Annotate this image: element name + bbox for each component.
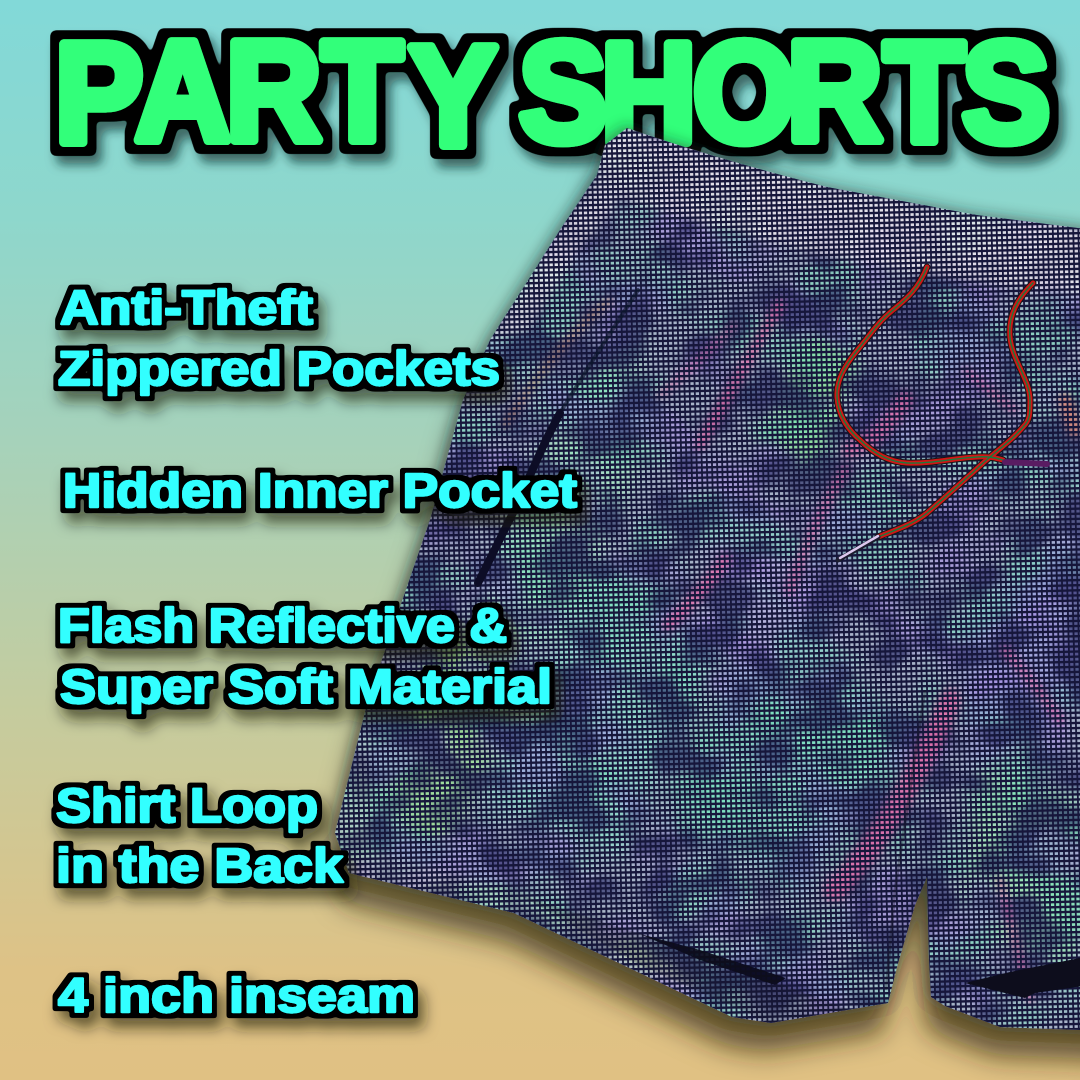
feature list xyxy=(56,282,577,1023)
feature: anti-theft zippered pockets xyxy=(58,282,500,396)
feature: anti-theft zippered pockets: Anti-Theft xyxy=(60,282,313,335)
hem shading xyxy=(520,895,850,1023)
pink reflective streaks xyxy=(505,300,1075,1000)
feature: flash reflective and super soft material: Super Soft Material xyxy=(60,661,552,714)
feature: 4 inch inseam: 4 inch inseam xyxy=(58,970,415,1023)
feature: shirt loop in the back: Shirt Loop xyxy=(56,780,318,833)
fabric colour patches xyxy=(360,300,1080,990)
waistband highlight xyxy=(490,128,1080,340)
icon: drawstring xyxy=(837,267,1033,560)
feature: hidden inner pocket: Hidden Inner Pocket xyxy=(63,465,577,518)
dot weave xyxy=(300,100,1080,1050)
title: PARTY SHORTS xyxy=(55,13,1050,176)
side seam xyxy=(886,690,925,990)
feature: shirt loop in the back: in the Back xyxy=(56,840,343,893)
icon: small purple zipper xyxy=(1005,462,1047,464)
icon: inner leg openings xyxy=(640,934,1080,998)
icon: side zipper pocket xyxy=(478,290,638,583)
feature: flash reflective and super soft material xyxy=(58,600,552,714)
camouflage print layers xyxy=(300,100,1080,1050)
feature: shirt loop in the back xyxy=(56,780,343,893)
feature: anti-theft zippered pockets: Zippered Pockets xyxy=(58,343,500,396)
shorts product photo xyxy=(300,100,1080,1050)
feature: flash reflective and super soft material: Flash Reflective & xyxy=(58,600,507,653)
hem highlight xyxy=(335,700,700,990)
